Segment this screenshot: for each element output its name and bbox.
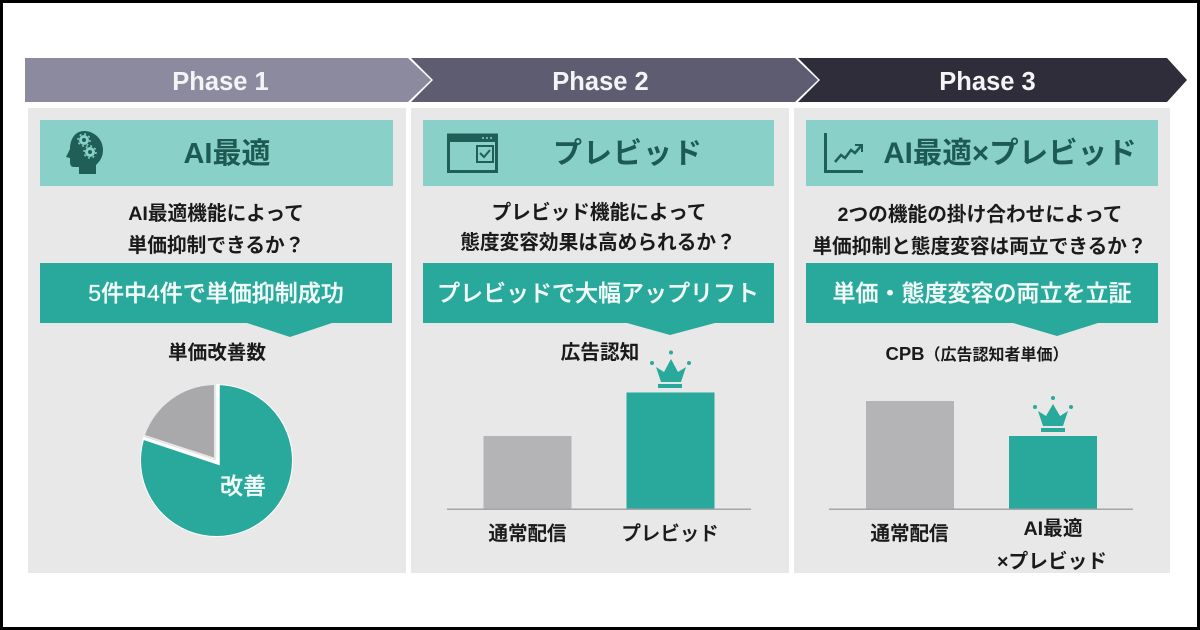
icon: crown <box>650 350 691 388</box>
chart title: CPB（広告認知者単価） <box>885 343 1069 364</box>
icon: line chart <box>826 133 863 172</box>
question text: プレビッド機能によって <box>492 202 706 224</box>
bar label <box>997 518 1107 573</box>
result callout <box>423 263 774 335</box>
chart title: 広告認知 <box>561 342 639 364</box>
panel: Phase 3 AI最適×プレビッド <box>794 108 1170 573</box>
header band: AI最適 <box>40 120 393 186</box>
result callout <box>806 263 1158 336</box>
icon: head with gears <box>66 131 103 174</box>
bar chart: CPB <box>829 396 1133 573</box>
bar label: AI最適 <box>1023 518 1083 540</box>
bar label: ×プレビッド <box>997 551 1107 573</box>
phase 1 arrow: Phase 1 <box>172 68 269 96</box>
phase 2 arrow <box>411 58 818 102</box>
bar label: プレビッド <box>621 523 719 545</box>
chart title: 単価改善数 <box>168 342 266 364</box>
heading: AI最適: AI最適 <box>183 137 271 170</box>
pie chart <box>140 384 292 536</box>
question text: 2つの機能の掛け合わせによって <box>838 204 1122 226</box>
bar label: 通常配信 <box>488 523 567 545</box>
icon: browser window with check <box>448 134 497 172</box>
question text: 単価抑制と態度変容は両立できるか？ <box>812 235 1147 258</box>
heading: プレビッド: プレビッド <box>553 137 703 170</box>
header band: プレビッド <box>423 120 774 186</box>
question text: 単価抑制できるか？ <box>128 235 304 257</box>
question text <box>128 203 304 257</box>
icon: crown <box>1033 396 1073 432</box>
heading: AI最適×プレビッド: AI最適×プレビッド <box>883 137 1137 170</box>
bar chart: 広告認知 <box>447 350 751 545</box>
result callout <box>40 263 392 337</box>
phase 3 arrow <box>798 58 1187 102</box>
panel: Phase 2 プレビッド <box>411 108 789 573</box>
question text <box>460 202 736 254</box>
question text: AI最適機能によって <box>128 203 304 225</box>
phase 2 arrow: Phase 2 <box>552 68 649 96</box>
bar label: 通常配信 <box>870 523 949 545</box>
phase 3 arrow: Phase 3 <box>939 68 1036 96</box>
panel: Phase 1 AI最適 <box>28 108 406 573</box>
phase 1 arrow <box>25 58 431 102</box>
label: 改善: 改善 <box>220 473 266 499</box>
result callout: プレビッドで大幅アップリフト <box>437 280 759 306</box>
header band: AI最適×プレビッド <box>806 120 1158 186</box>
result callout: 5件中4件で単価抑制成功 <box>88 280 344 306</box>
question text: 態度変容効果は高められるか？ <box>460 231 736 254</box>
question text <box>812 204 1147 258</box>
result callout: 単価・態度変容の両立を立証 <box>832 280 1132 306</box>
